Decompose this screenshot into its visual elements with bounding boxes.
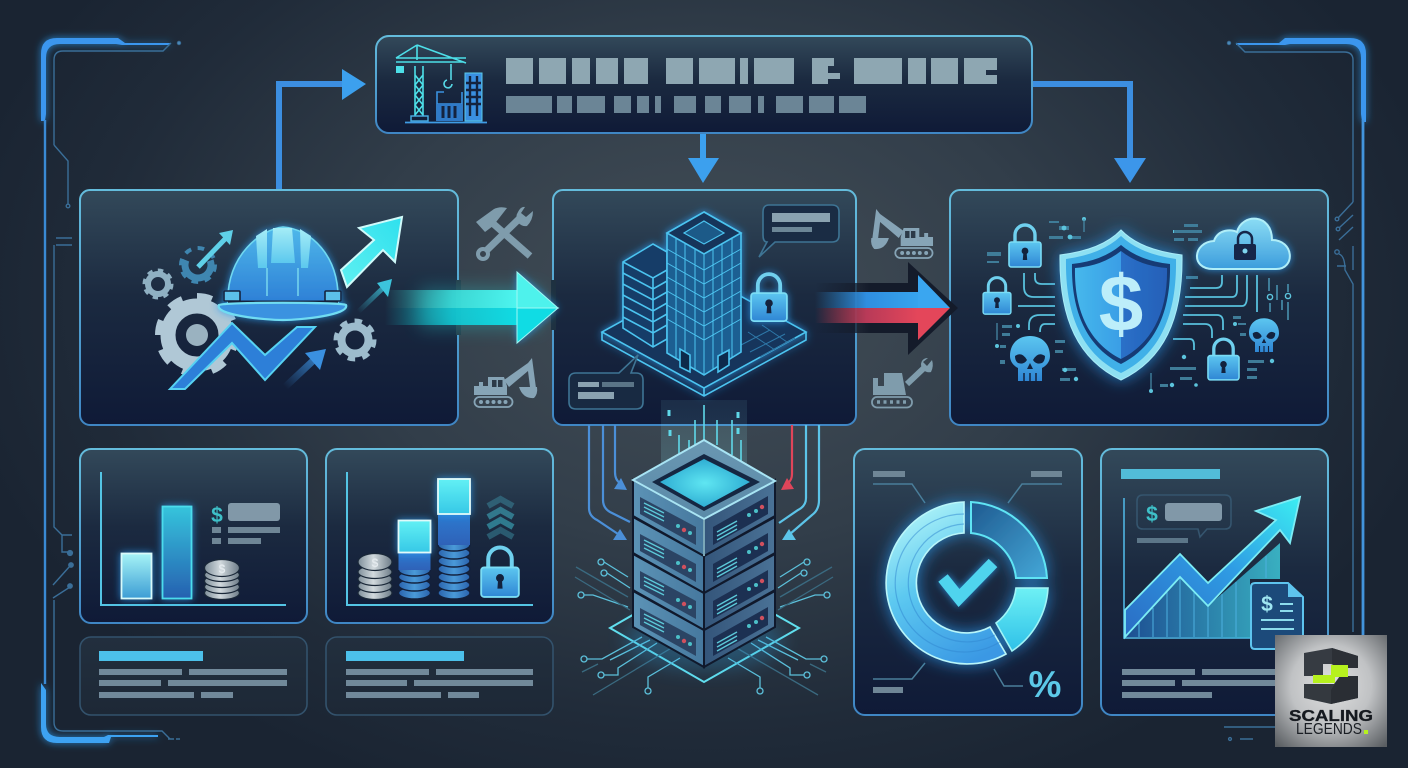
connector lines into server (589, 425, 819, 540)
circuit traces around shield (1018, 273, 1257, 350)
icon: invoice document (1251, 583, 1303, 649)
icon: grey coin stack (358, 554, 392, 600)
percent sign: % (1029, 664, 1061, 705)
icon: padlock upper left (1009, 225, 1041, 267)
label lines (873, 471, 1062, 693)
arrow: cyan flow to centre (385, 272, 558, 343)
icon: padlock lower right (1208, 339, 1239, 380)
icon: skull right (1249, 318, 1279, 352)
icon: tower crane and buildings (396, 45, 487, 122)
icon: coin stack: $ (219, 562, 226, 576)
donut chart (886, 502, 1048, 664)
callout: top right (759, 205, 839, 257)
stacked bar: medium (398, 520, 430, 599)
axes (1124, 498, 1250, 638)
logo lime dot (1364, 730, 1368, 734)
arrow: blue and red flow to right panel (815, 262, 958, 355)
title banner panel (376, 36, 1032, 133)
panel: right shield and threats (950, 190, 1328, 425)
chart panel: stacked coins and lock (326, 449, 553, 623)
text panel 1 (80, 637, 307, 715)
icon: skull left (1010, 336, 1050, 381)
icon: blue up arrow (285, 349, 326, 387)
trend arrow (1125, 497, 1300, 637)
dollar value label (211, 503, 280, 544)
icon: shield with dollar (1060, 230, 1182, 380)
icon: large gear (159, 297, 235, 373)
icon: bulldozer with wrench (872, 358, 933, 408)
callout: bottom left (569, 355, 643, 409)
icon: small cyan arrow (358, 279, 392, 312)
server layer 1 (633, 480, 775, 556)
leader lines (873, 484, 1062, 686)
icon: padlock (751, 274, 787, 321)
icon: shield with dollar: $ (1099, 259, 1143, 348)
icon: hammer and wrench (476, 207, 533, 259)
icon: grey coin stack: $ (372, 556, 379, 570)
icon: padlock (481, 547, 519, 597)
icon: blue gear with arrow (181, 230, 233, 282)
subtitle text placeholder blocks (506, 96, 866, 113)
area under trend (1125, 543, 1280, 638)
icon: excavator upper right (871, 209, 933, 258)
chart panel: bars and coins (80, 449, 307, 623)
icon: upward chevrons (488, 499, 513, 537)
bar: tall (162, 506, 192, 598)
icon: server stack (624, 440, 784, 670)
title text placeholder blocks (506, 58, 997, 84)
stacked bar: tall (438, 479, 470, 599)
icon: small gear (144, 270, 172, 298)
text lines (1122, 669, 1275, 698)
server layer 3 (633, 554, 775, 630)
logo mark (1304, 648, 1358, 704)
panel: centre secure building (551, 190, 856, 500)
value bubble (1137, 495, 1231, 543)
arrow: title down to right panel (1032, 84, 1146, 183)
icon: coin stack (204, 560, 240, 600)
light beam (661, 400, 747, 500)
server layer 2 (633, 517, 775, 593)
light data streams above server (669, 405, 741, 472)
logo: Scaling Legends (1275, 635, 1387, 747)
icon: right gear (336, 321, 374, 359)
icon: large cyan up arrow (341, 217, 402, 287)
panel: growth chart (1101, 449, 1328, 715)
icon: isometric building on platform (602, 212, 806, 396)
icon: excavator lower left (474, 358, 537, 407)
value bubble: $ (1146, 503, 1158, 526)
icon: cloud with lock (1197, 219, 1290, 269)
data dots and dashes (987, 217, 1291, 393)
logo: Scaling Legends: LEGENDS (1296, 721, 1362, 738)
icon: check mark (943, 563, 993, 598)
icon: zigzag growth line (170, 323, 315, 389)
arrow: title down to centre panel (688, 133, 719, 183)
panel: left hard hat and growth (80, 190, 458, 425)
arrow: left panel up to title (279, 69, 366, 190)
bar: short (122, 554, 152, 598)
icon: hard hat (219, 227, 346, 320)
panel: donut chart (854, 449, 1082, 715)
icon: invoice document: $ (1261, 593, 1273, 616)
server top with glowing screen (633, 440, 775, 556)
server layer 4 (633, 591, 775, 667)
icon: padlock mid left (983, 278, 1011, 314)
logo wordmark: SCALING (1289, 708, 1373, 725)
circuit base under server (575, 559, 833, 695)
dollar value label: $ (211, 504, 223, 527)
text panel 2 (326, 637, 553, 715)
